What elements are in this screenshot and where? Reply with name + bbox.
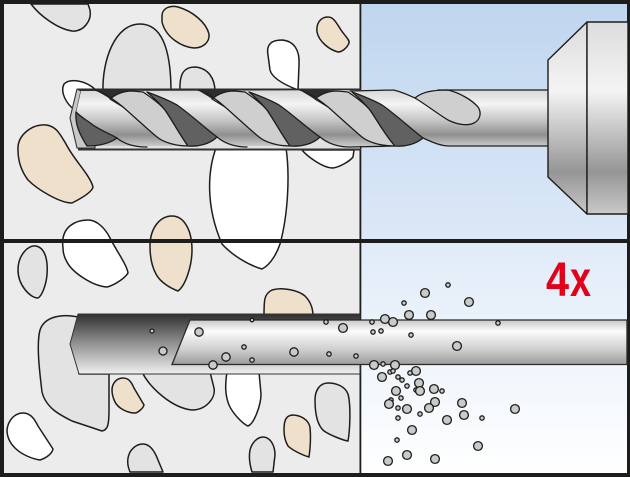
drill hole, upper panel [71,88,361,150]
repeat count label: 4x: x [570,251,591,307]
dust particles [150,283,519,465]
flutes: dark wedges [147,92,423,146]
cleaning rod [172,320,627,364]
hole floor showing under flutes [188,137,350,148]
panel: concrete background [0,0,360,477]
flutes: light lobes [110,90,480,146]
aggregate stones in concrete [7,4,354,472]
drill chuck head [548,22,628,214]
flute top shadows [95,90,336,99]
drill tip [70,89,95,148]
repeat count label: 4x: 4 [546,254,569,307]
drill bit [70,89,548,148]
drill edge lines [95,90,548,147]
hole, lower panel [70,314,360,374]
panel: air background, lower [360,240,630,477]
flute: first dark wedge [76,112,117,146]
drill shaft [76,90,548,146]
panel: air background, upper [360,0,630,240]
